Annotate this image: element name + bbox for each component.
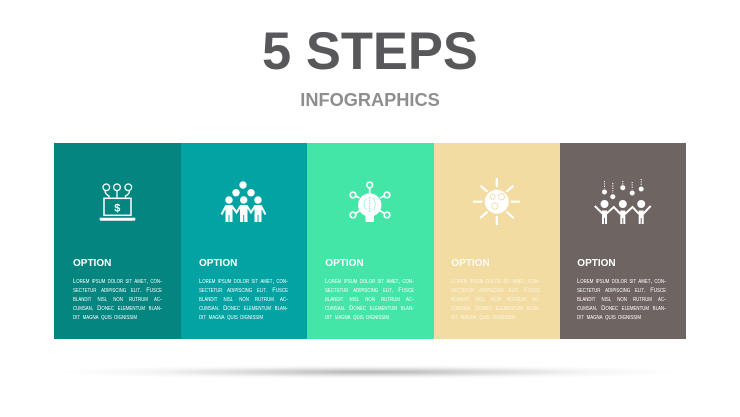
body text: sectetur adipiscing elit. Fusce xyxy=(451,287,540,294)
option heading: OPTION xyxy=(199,258,237,269)
body text: blandit nisl non rutrum ac- xyxy=(325,296,414,303)
icon: brain bulb with nodes xyxy=(349,181,391,222)
body text: sectetur adipiscing elit. Fusce xyxy=(199,287,288,294)
panel: step 3 xyxy=(307,143,434,339)
panel: step 5 xyxy=(560,143,686,339)
option heading: OPTION xyxy=(73,258,111,269)
body text: sectetur adipiscing elit. Fusce xyxy=(73,287,162,294)
body text: cumsan. Donec elementum blan- xyxy=(577,305,666,312)
body text: cumsan. Donec elementum blan- xyxy=(325,305,414,312)
body text: blandit nisl non rutrum ac- xyxy=(451,296,540,303)
icon: laptop with dollar and nodes xyxy=(100,183,136,221)
body text: blandit nisl non rutrum ac- xyxy=(577,296,666,303)
panel: step 1 xyxy=(54,143,181,339)
body text: Lorem ipsum dolor sit amet, con- xyxy=(325,278,414,284)
body text: dit magna quis dignissim xyxy=(73,314,137,321)
body text: blandit nisl non rutrum ac- xyxy=(199,296,288,303)
icon: people raising arms with falling coins xyxy=(594,179,652,224)
ground shadow xyxy=(55,365,685,379)
body text: Lorem ipsum dolor sit amet, con- xyxy=(451,278,540,284)
body text: cumsan. Donec elementum blan- xyxy=(73,305,162,312)
body text: Lorem ipsum dolor sit amet, con- xyxy=(73,278,162,284)
body text xyxy=(199,278,288,321)
body text: sectetur adipiscing elit. Fusce xyxy=(577,287,666,294)
body text: Lorem ipsum dolor sit amet, con- xyxy=(577,278,666,284)
body text xyxy=(325,278,414,321)
subtitle: INFOGRAPHICS xyxy=(300,90,440,110)
body text: cumsan. Donec elementum blan- xyxy=(199,305,288,312)
icon: group of people xyxy=(220,181,266,222)
icon: laptop with dollar and nodes: $ xyxy=(114,202,120,214)
body text: dit magna quis dignissim xyxy=(199,314,263,321)
option heading: OPTION xyxy=(451,258,490,269)
panel: step 2 xyxy=(181,143,307,339)
body text: cumsan. Donec elementum blan- xyxy=(451,305,540,312)
option heading: OPTION xyxy=(577,258,616,269)
body text xyxy=(73,278,162,321)
body text: Lorem ipsum dolor sit amet, con- xyxy=(199,278,288,284)
icon: sun with gears xyxy=(473,178,520,225)
body text: dit magna quis dignissim xyxy=(325,314,389,321)
body text xyxy=(451,278,540,321)
body text: sectetur adipiscing elit. Fusce xyxy=(325,287,414,294)
body text: dit magna quis dignissim xyxy=(451,314,515,321)
title: 5 STEPS xyxy=(262,22,478,81)
body text: blandit nisl non rutrum ac- xyxy=(73,296,162,303)
body text xyxy=(577,278,666,321)
option heading: OPTION xyxy=(325,258,364,269)
panel: step 4 xyxy=(434,143,560,339)
body text: dit magna quis dignissim xyxy=(577,314,641,321)
